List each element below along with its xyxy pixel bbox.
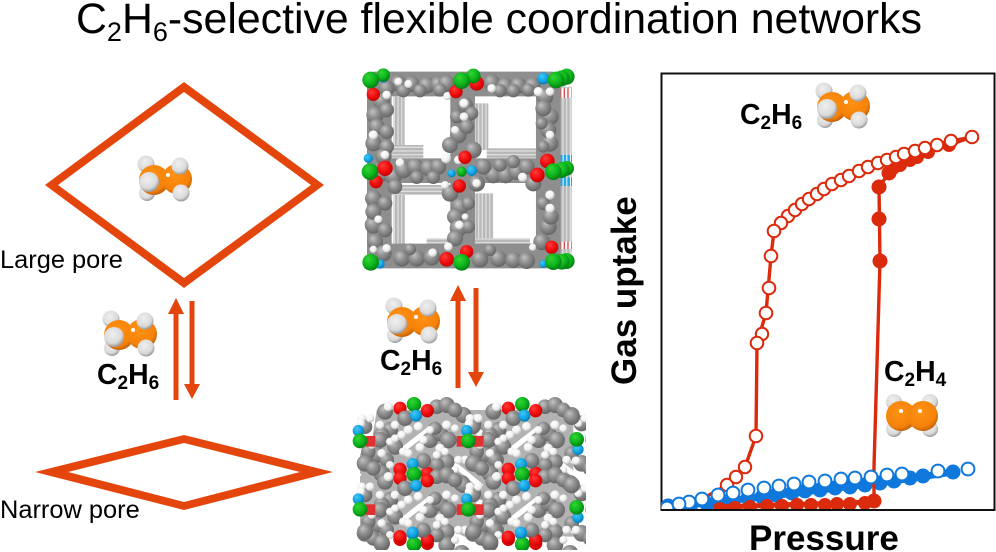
left C2H6 label: C: [97, 359, 118, 391]
C2H6 filled series line: [874, 137, 972, 502]
icon: ethane left: [102, 310, 157, 356]
plot C2H4 label: C: [884, 356, 905, 388]
frame base: [373, 83, 553, 260]
atoms: chlorines: [362, 68, 575, 271]
plot C2H6 label: 6: [792, 113, 802, 134]
chart: gas uptake isotherm: [660, 74, 995, 516]
middle C2H6 label: 6: [432, 359, 442, 380]
plot C2H6 label: C: [740, 99, 761, 131]
title: 2: [107, 17, 122, 47]
title: 6: [153, 17, 168, 47]
plot C2H6 label: H: [771, 99, 792, 131]
left C2H6 label: 6: [149, 373, 159, 394]
arrow: left down: [184, 301, 200, 399]
narrow pore label: Narrow pore: [0, 496, 140, 524]
icon: ethane in plot: [816, 82, 870, 128]
packed base with diagonal slits: [360, 410, 578, 537]
atoms: nitrogens: [364, 72, 549, 269]
left C2H6 label: 2: [118, 373, 128, 394]
x axis line: [661, 509, 995, 511]
icon: ethane middle: [386, 298, 440, 344]
panel: large pore crystal structure: [362, 68, 575, 271]
large pore label: Large pore: [0, 246, 123, 274]
right edge atoms: [562, 408, 584, 534]
middle C2H6 label: H: [411, 345, 432, 377]
middle C2H6 label: 2: [401, 359, 411, 380]
icon: ethylene in plot: [886, 394, 938, 437]
atoms: oxygens: [367, 76, 558, 267]
y axis label: Gas uptake: [605, 196, 644, 385]
plot C2H4 label: H: [915, 356, 936, 388]
plot C2H6 label: 2: [761, 113, 771, 134]
icon: ethane in large pore: [138, 156, 192, 202]
C2H4 open series: [661, 463, 974, 514]
plot C2H4 label: 4: [936, 370, 947, 391]
C2H6 open series line: [708, 136, 965, 497]
left C2H6 label: H: [128, 359, 149, 391]
large pore rhombus: [45, 82, 324, 288]
plot frame: [662, 74, 994, 510]
atoms: frame carbons: [365, 74, 559, 269]
middle C2H6 label: C: [380, 345, 401, 377]
narrow pore rhombus: [35, 435, 333, 510]
atoms: hydrogens: [369, 78, 555, 257]
C2H4 filled series line: [668, 472, 953, 507]
plot C2H4 label: 2: [905, 370, 915, 391]
bottom clusters: [357, 523, 542, 552]
C2H4 filled series: [661, 464, 960, 509]
arrow: middle up: [450, 285, 466, 388]
C2H6 filled series: [713, 138, 956, 516]
panel: narrow pore crystal structure: [352, 397, 586, 550]
C2H6 open series: [721, 131, 978, 491]
arrow: middle down: [468, 288, 484, 387]
arrow: left up: [168, 298, 184, 400]
